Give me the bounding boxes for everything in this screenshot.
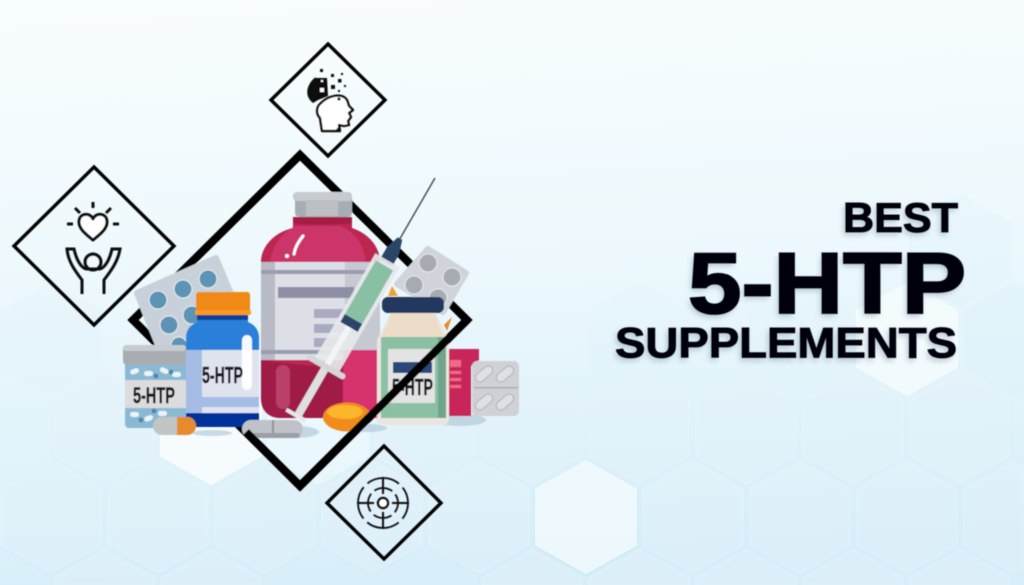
medicine group: [123, 167, 519, 438]
title: [613, 194, 966, 370]
diamond lower right edge over bottles: [246, 320, 467, 486]
syringe: [277, 167, 454, 429]
shadows: [192, 414, 486, 438]
hexagon pattern: [0, 193, 1024, 585]
small capsule jar: [123, 345, 186, 428]
orange-cap blue bottle: [186, 292, 259, 427]
diamond icon: happy person: [14, 167, 174, 325]
icon: head with stars: [307, 69, 353, 131]
orange oval pill: [323, 402, 371, 432]
icon: crosshair target: [357, 477, 409, 529]
heading: 5-HTP: 5-HTP: [688, 236, 966, 332]
icon: person lifting heart: [67, 202, 120, 294]
blue blister pack: [137, 258, 240, 356]
orange and grey capsule: [153, 417, 196, 435]
label: 5-HTP jar: 5-HTP: [133, 383, 175, 408]
diamond icon: target: [327, 446, 441, 559]
label: 5-HTP right: 5-HTP: [392, 374, 433, 400]
label: 5-HTP blue: 5-HTP: [202, 362, 243, 388]
red carton: [449, 349, 479, 416]
grey blister pack: [397, 249, 466, 312]
diamond icon: mind: [271, 44, 385, 156]
big diamond frame: [133, 155, 467, 486]
title: 5-HTP: [686, 239, 964, 335]
grey flat tablet: [242, 420, 303, 438]
title: BEST: [841, 197, 956, 244]
title: SUPPLEMENTS: [613, 322, 955, 370]
right bottle: [377, 286, 452, 425]
big red bottle: [261, 192, 380, 418]
white capsule blister: [472, 361, 519, 416]
heading: BEST: BEST: [843, 194, 958, 241]
heading: SUPPLEMENTS: SUPPLEMENTS: [615, 320, 957, 368]
